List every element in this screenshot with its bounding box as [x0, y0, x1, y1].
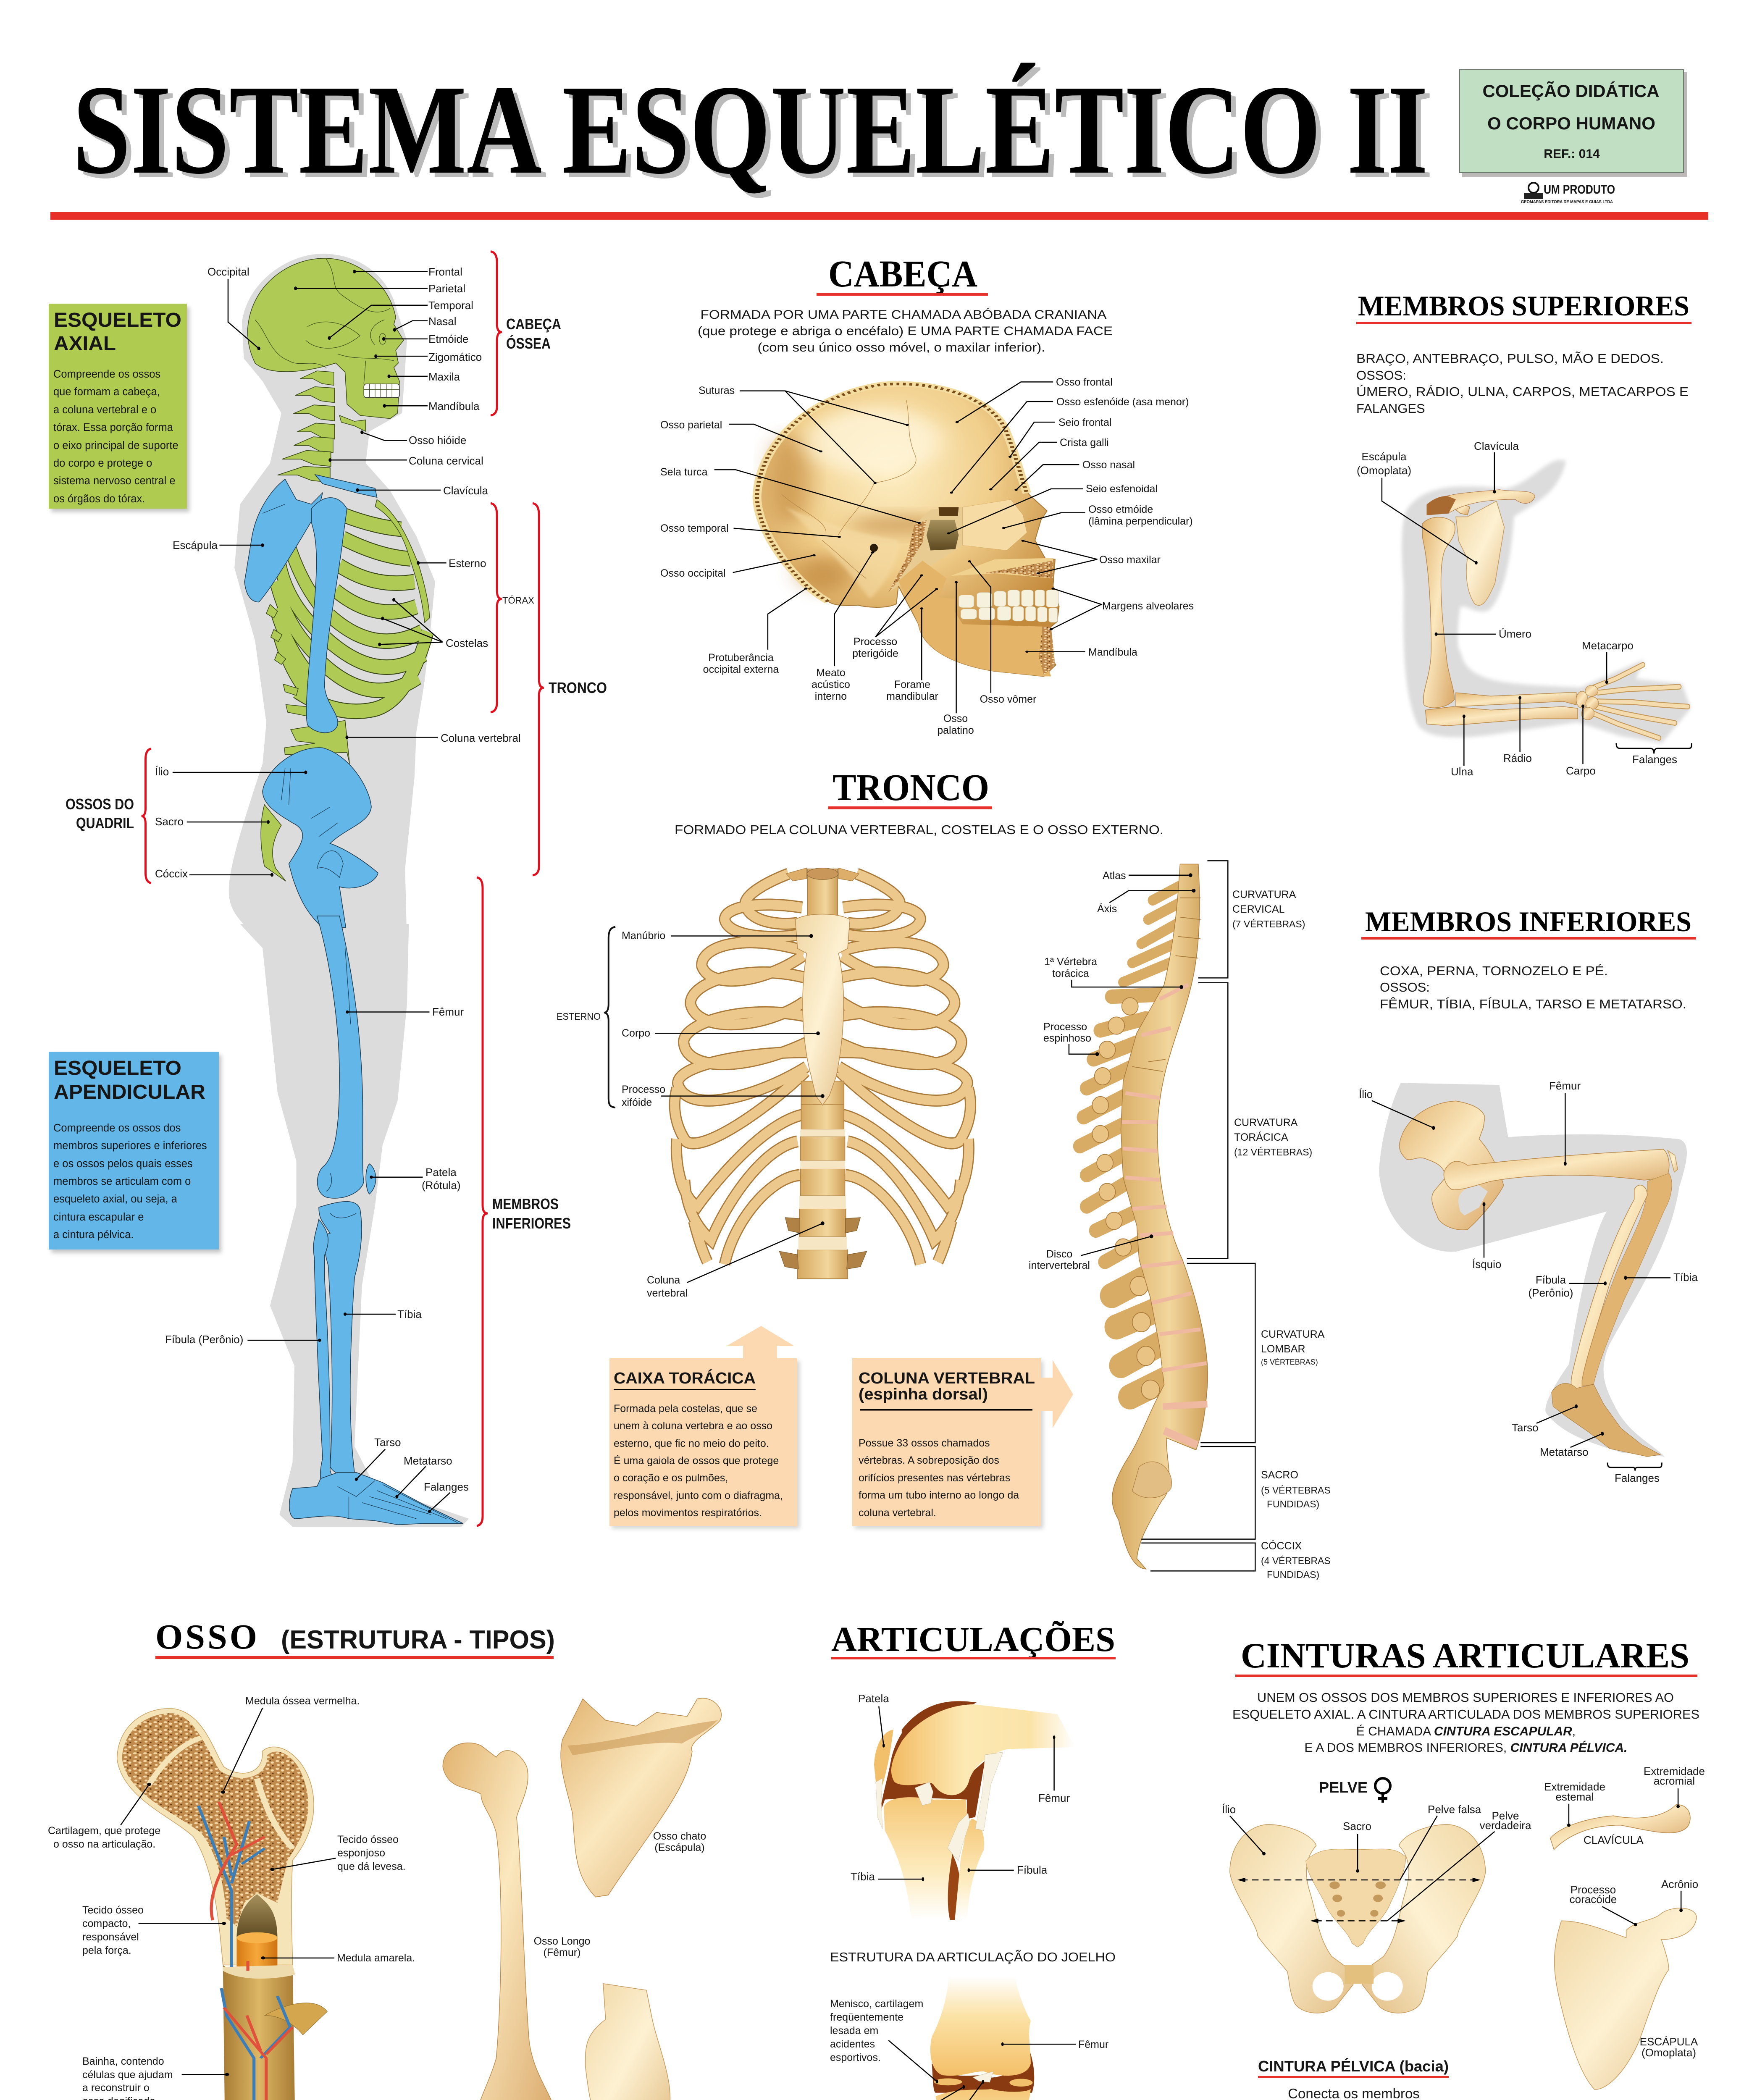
- vertebral column labels: torácica: [1052, 968, 1089, 979]
- knee labels top: Tíbia: [851, 1870, 875, 1883]
- skull labels: Osso etmóide: [1088, 504, 1153, 515]
- vertebral column labels: (7 VÉRTEBRAS): [1232, 919, 1305, 929]
- intro cinturas: [1232, 1690, 1699, 1755]
- vertebral column labels: Atlas: [1103, 870, 1126, 882]
- callout: caixa torácica with up arrow: unem à coluna vertebra e ao osso: [614, 1420, 772, 1432]
- cinturas labels: acromial: [1654, 1774, 1695, 1787]
- skull labels: acústico: [812, 679, 850, 690]
- callout: esqueleto apendicular: cintura escapular e: [53, 1211, 144, 1223]
- bracket headings: CABEÇA: [506, 315, 561, 333]
- pelve heading with female symbol: [1319, 1778, 1390, 1803]
- cinturas labels: ESCÁPULA: [1640, 2035, 1698, 2048]
- leg labels: Ílio: [1359, 1088, 1373, 1100]
- leg labels: [1359, 1079, 1698, 1484]
- skeleton labels: Zigomático: [428, 351, 482, 363]
- skull labels: Osso maxilar: [1099, 554, 1161, 566]
- heading cinturas: CINTURAS ARTICULARES: [1241, 1636, 1689, 1675]
- callout: caixa torácica with up arrow: pelos movimentos respiratórios.: [614, 1507, 762, 1519]
- leg labels: Ísquio: [1472, 1258, 1501, 1270]
- panel: cabeça: [660, 253, 1194, 736]
- vertebral column labels: FUNDIDAS): [1267, 1499, 1319, 1509]
- osso labels: Osso chato: [653, 1830, 706, 1842]
- arm labels: (Omoplata): [1357, 464, 1411, 477]
- callout: esqueleto axial: do corpo e protege o: [53, 457, 152, 469]
- bone section illustration: [117, 1708, 336, 2100]
- cinturas labels: [1222, 1765, 1705, 2059]
- cinturas labels: verdadeira: [1480, 1819, 1531, 1832]
- callout: coluna vertebral with right arrow: COLUNA VERTEBRAL: [859, 1370, 1035, 1387]
- skull labels: mandibular: [886, 690, 938, 702]
- intro tronco: FORMADO PELA COLUNA VERTEBRAL, COSTELAS E O OSSO EXTERNO.: [675, 822, 1163, 837]
- callout: esqueleto axial: ESQUELETO: [54, 309, 181, 331]
- intro membros inferiores: FÊMUR, TÍBIA, FÍBULA, TARSO E METATARSO.: [1380, 997, 1686, 1011]
- vertebral column labels: CERVICAL: [1232, 903, 1285, 915]
- appendicular bones upper (blue): [244, 475, 378, 928]
- callout: caixa torácica with up arrow: responsável, junto com o diafragma,: [614, 1490, 783, 1502]
- cinturas labels: Ílio: [1222, 1803, 1236, 1816]
- skeleton labels: (Rótula): [422, 1179, 460, 1192]
- cinturas labels: estemal: [1555, 1790, 1594, 1803]
- publisher mark: UM PRODUTO: [1544, 183, 1615, 197]
- skeleton labels: Clavícula: [443, 484, 488, 497]
- skeleton labels: Nasal: [428, 315, 456, 328]
- callout: esqueleto axial: [49, 304, 189, 512]
- skeleton labels: Frontal: [428, 265, 462, 278]
- callout: caixa torácica with up arrow: o coração e os pulmões,: [614, 1472, 728, 1484]
- skull labels: Osso occipital: [660, 567, 726, 579]
- osso labels: compacto,: [82, 1918, 131, 1929]
- vertebral column illustration: [1069, 861, 1255, 1571]
- skull labels: Osso: [943, 713, 968, 724]
- skeleton labels: Falanges: [424, 1480, 469, 1493]
- skull labels: Osso temporal: [660, 522, 729, 534]
- callout: esqueleto axial: a coluna vertebral e o: [53, 404, 156, 416]
- skeleton labels: Tarso: [374, 1436, 401, 1449]
- osso labels: responsável: [82, 1931, 139, 1943]
- skeleton labels: Metatarso: [404, 1454, 452, 1467]
- osso labels: [48, 1695, 706, 2100]
- vertebral column labels: CURVATURA: [1234, 1117, 1298, 1129]
- callout: esqueleto axial: sistema nervoso central e: [53, 475, 176, 487]
- cinturas labels: Acrônio: [1661, 1878, 1698, 1890]
- vertebral column labels: (5 VÉRTEBRAS): [1261, 1358, 1318, 1366]
- vertebral column labels: 1ª Vértebra: [1044, 956, 1097, 968]
- skeleton labels: [155, 265, 534, 1493]
- bracket headings: INFERIORES: [492, 1215, 571, 1232]
- skeleton labels: Esterno: [449, 557, 486, 570]
- leg labels: Falanges: [1615, 1472, 1660, 1484]
- knee labels top: Patela: [858, 1692, 889, 1705]
- vertebral column labels: FUNDIDAS): [1267, 1569, 1319, 1580]
- intro cinturas: UNEM OS OSSOS DOS MEMBROS SUPERIORES E INFERIORES AO: [1257, 1690, 1674, 1705]
- body silhouette: [229, 254, 469, 1527]
- skeleton labels: Coluna cervical: [409, 454, 483, 467]
- vertebral column labels: CÓCCIX: [1261, 1540, 1302, 1552]
- heading tronco: TRONCO: [833, 767, 989, 808]
- osso labels: Osso Longo: [534, 1935, 590, 1947]
- skull labels: Seio frontal: [1058, 417, 1111, 428]
- cinturas labels: Processo: [1571, 1883, 1616, 1896]
- clavicle and scapula illustration: [1550, 1788, 1697, 2090]
- vertebral column labels: (12 VÉRTEBRAS): [1234, 1147, 1312, 1158]
- intro membros superiores: BRAÇO, ANTEBRAÇO, PULSO, MÃO E DEDOS.: [1356, 351, 1664, 366]
- skull labels: occipital externa: [703, 664, 779, 675]
- intro cabeça: FORMADA POR UMA PARTE CHAMADA ABÓBADA CRANIANA: [701, 308, 1106, 322]
- callout: esqueleto apendicular: APENDICULAR: [54, 1081, 205, 1103]
- callout: caixa torácica with up arrow: [609, 1326, 800, 1529]
- skull labels: Protuberância: [708, 652, 774, 664]
- osso labels: Cartilagem, que protege: [48, 1825, 160, 1837]
- skeleton labels: Ílio: [155, 765, 169, 778]
- leg labels: Metatarso: [1540, 1446, 1589, 1458]
- skull labels: Mandíbula: [1088, 646, 1137, 658]
- skull labels: [660, 376, 1194, 736]
- skull labels: Osso frontal: [1056, 376, 1113, 388]
- leg illustration: [1372, 1083, 1687, 1471]
- skull labels: Osso parietal: [660, 419, 722, 431]
- intro cinturas: É CHAMADA CINTURA ESCAPULAR,: [1356, 1725, 1576, 1738]
- callout: esqueleto apendicular: membros se articulam com o: [53, 1176, 191, 1187]
- rib cage labels: Manúbrio: [622, 930, 665, 942]
- leg bones (blue): [289, 916, 463, 1525]
- intro membros inferiores: COXA, PERNA, TORNOZELO E PÉ.: [1380, 963, 1608, 978]
- rib cage labels: ESTERNO: [557, 1011, 601, 1022]
- skeleton labels: Patela: [425, 1166, 457, 1179]
- skull labels: Processo: [854, 636, 897, 648]
- heading osso: [155, 1617, 555, 1659]
- leg labels: Tarso: [1512, 1421, 1539, 1434]
- arm labels: Clavícula: [1474, 440, 1519, 452]
- callout: caixa torácica with up arrow: Formada pela costelas, que se: [614, 1403, 757, 1415]
- callout: esqueleto axial: AXIAL: [54, 333, 116, 355]
- vertebral column labels: (4 VÉRTEBRAS: [1261, 1555, 1331, 1566]
- panel: full skeleton: [155, 254, 534, 1527]
- osso labels: Tecido ósseo: [82, 1904, 144, 1916]
- intro membros superiores: FALANGES: [1356, 401, 1425, 416]
- osso labels: pela força.: [82, 1945, 131, 1956]
- osso labels: (Fêmur): [544, 1947, 580, 1958]
- intro cinturas: ESQUELETO AXIAL. A CINTURA ARTICULADA DOS MEMBROS SUPERIORES: [1232, 1707, 1699, 1722]
- osso labels: o osso na articulação.: [53, 1838, 155, 1850]
- vertebral column labels: SACRO: [1261, 1469, 1298, 1481]
- intro membros superiores: ÚMERO, RÁDIO, ULNA, CARPOS, METACARPOS E: [1356, 384, 1689, 399]
- knee labels bottom: acidentes: [830, 2038, 875, 2050]
- knee labels top: Fêmur: [1038, 1792, 1070, 1804]
- callout: esqueleto apendicular: [49, 1052, 221, 1253]
- intro cabeça: [698, 308, 1113, 354]
- skeleton labels: Mandíbula: [428, 400, 480, 412]
- vertebral column labels: CURVATURA: [1261, 1328, 1325, 1340]
- callout: esqueleto axial: que formam a cabeça,: [53, 386, 160, 398]
- knee labels top: Fíbula: [1017, 1864, 1048, 1876]
- arm labels: Ulna: [1451, 765, 1473, 778]
- text block: cintura pélvica: [1255, 2058, 1453, 2100]
- title: SISTEMA ESQUELÉTICO II: [78, 63, 1433, 205]
- rib cage labels: Coluna: [647, 1274, 680, 1286]
- cinturas labels: Pelve falsa: [1428, 1803, 1481, 1816]
- skull labels: Meato: [816, 667, 846, 679]
- skeleton labels: Coluna vertebral: [441, 732, 521, 744]
- axial skeleton bones (green): [247, 258, 429, 881]
- callout: caixa torácica with up arrow: É uma gaiola de ossos que protege: [614, 1454, 779, 1467]
- cinturas labels: Extremidade: [1544, 1780, 1605, 1793]
- knee front view: [888, 1976, 1076, 2100]
- skeleton labels: Etmóide: [428, 333, 468, 345]
- skull labels: Osso esfenóide (asa menor): [1056, 396, 1189, 408]
- bracket headings: TRONCO: [549, 679, 607, 696]
- bracket headings: QUADRIL: [76, 814, 134, 832]
- arm labels: [1357, 440, 1677, 778]
- callout: coluna vertebral with right arrow: [852, 1358, 1073, 1529]
- callout: esqueleto apendicular: ESQUELETO: [54, 1057, 181, 1079]
- heading osso: OSSO: [155, 1617, 257, 1656]
- heading articulações: ARTICULAÇÕES: [831, 1620, 1115, 1659]
- vertebral column labels: Áxis: [1097, 903, 1117, 915]
- header red bar: [50, 212, 1708, 220]
- callout: esqueleto apendicular: Compreende os ossos dos: [53, 1122, 181, 1134]
- panel: tronco: [557, 767, 1331, 1580]
- skeleton labels: Maxila: [428, 370, 460, 383]
- collection badge: REF.: 014: [1544, 147, 1600, 161]
- leg labels: Fíbula: [1536, 1273, 1566, 1286]
- knee labels bottom: freqüentemente: [830, 2011, 903, 2023]
- pelve heading with female symbol: PELVE: [1319, 1779, 1368, 1796]
- skeleton labels: Occipital: [207, 265, 249, 278]
- intro membros inferiores: [1380, 963, 1686, 1011]
- collection badge: [1460, 70, 1687, 177]
- skull illustration: [714, 382, 1101, 713]
- rib cage labels: xifóide: [622, 1097, 652, 1108]
- collection badge: O CORPO HUMANO: [1487, 113, 1655, 133]
- callout: esqueleto axial: Compreende os ossos: [53, 368, 160, 380]
- rib cage labels: vertebral: [647, 1287, 688, 1299]
- publisher mark: GEOMAPAS EDITORA DE MAPAS E GUIAS LTDA: [1521, 200, 1613, 205]
- arm labels: Escápula: [1362, 450, 1407, 463]
- skull labels: Suturas: [699, 385, 735, 396]
- skeleton labels: Tíbia: [397, 1308, 422, 1320]
- arm labels: Rádio: [1503, 752, 1532, 764]
- callout: coluna vertebral with right arrow: Possue 33 ossos chamados: [859, 1437, 990, 1449]
- knee labels bottom: Menisco, cartilagem: [830, 1998, 923, 2010]
- skull labels: Forame: [894, 679, 930, 690]
- red braces: [142, 252, 544, 1526]
- skeleton labels: Escápula: [173, 539, 218, 551]
- bracket headings: OSSOS DO: [66, 795, 134, 813]
- arm labels: Úmero: [1499, 627, 1531, 640]
- skeleton labels: Temporal: [428, 299, 473, 312]
- skeleton labels: Sacro: [155, 815, 184, 828]
- vertebral column labels: Disco: [1046, 1248, 1072, 1260]
- intro cinturas: E A DOS MEMBROS INFERIORES, CINTURA PÉLVICA.: [1305, 1740, 1627, 1755]
- heading membros superiores: MEMBROS SUPERIORES: [1358, 290, 1689, 322]
- vertebral column labels: intervertebral: [1029, 1260, 1090, 1271]
- skull labels: Osso vômer: [980, 693, 1036, 705]
- intro cabeça: (que protege e abriga o encéfalo) E UMA PARTE CHAMADA FACE: [698, 324, 1113, 338]
- osso labels: a reconstruir o: [82, 2082, 150, 2094]
- heading membros inferiores: MEMBROS INFERIORES: [1365, 906, 1691, 937]
- intro membros superiores: OSSOS:: [1356, 368, 1406, 383]
- osso labels: Bainha, contendo: [82, 2055, 164, 2067]
- vertebral column labels: LOMBAR: [1261, 1343, 1305, 1355]
- heading osso: (ESTRUTURA - TIPOS): [281, 1625, 555, 1654]
- skull labels: palatino: [937, 724, 974, 736]
- skeleton labels: Fêmur: [432, 1005, 464, 1018]
- arm labels: Falanges: [1632, 753, 1677, 766]
- callout: caixa torácica with up arrow: CAIXA TORÁCICA: [614, 1369, 756, 1387]
- cinturas labels: (Omoplata): [1641, 2046, 1696, 2059]
- osso labels: Tecido ósseo: [337, 1834, 399, 1845]
- vertebral column labels: CURVATURA: [1232, 889, 1296, 900]
- osso labels: esponjoso: [337, 1847, 385, 1859]
- knee labels bottom: Fêmur: [1078, 2039, 1108, 2050]
- knee side view: [874, 1701, 1075, 1920]
- skull labels: pterigóide: [852, 648, 898, 659]
- skull labels: Crista galli: [1060, 437, 1109, 449]
- skeleton labels: Osso hióide: [409, 434, 466, 446]
- knee labels bottom: [830, 1998, 1108, 2100]
- callout: coluna vertebral with right arrow: vértebras. A sobreposição dos: [859, 1454, 999, 1466]
- panel: articulações: [830, 1620, 1116, 2100]
- rib cage labels: Corpo: [622, 1027, 650, 1039]
- cinturas labels: Pelve: [1492, 1809, 1519, 1822]
- skull labels: interno: [815, 690, 847, 702]
- skeleton labels: Fíbula (Perônio): [165, 1333, 243, 1346]
- skeleton labels: Cóccix: [155, 867, 188, 880]
- bracket headings: ÓSSEA: [506, 334, 551, 352]
- skull labels: Margens alveolares: [1102, 600, 1194, 612]
- pelvis illustration: [1230, 1816, 1495, 2013]
- osso labels: que dá levesa.: [337, 1861, 406, 1872]
- title: SISTEMA ESQUELÉTICO II: [73, 58, 1428, 200]
- knee labels bottom: esportivos.: [830, 2052, 881, 2063]
- structure subheading: ESTRUTURA DA ARTICULAÇÃO DO JOELHO: [830, 1950, 1116, 1964]
- callout: coluna vertebral with right arrow: (espinha dorsal): [859, 1386, 988, 1403]
- vertebral column labels: TORÁCICA: [1234, 1131, 1288, 1143]
- rib cage illustration: [604, 868, 971, 1283]
- vertebral column labels: [1029, 870, 1331, 1580]
- callout: coluna vertebral with right arrow: forma um tubo interno ao longo da: [859, 1489, 1019, 1501]
- arm labels: Carpo: [1566, 764, 1596, 777]
- skull labels: Seio esfenoidal: [1086, 483, 1158, 495]
- skeleton labels: Costelas: [446, 637, 488, 649]
- leg labels: Fêmur: [1549, 1079, 1581, 1092]
- leg labels: (Perônio): [1529, 1286, 1573, 1299]
- bracket headings: MEMBROS: [492, 1195, 559, 1213]
- panel: osso: [48, 1617, 721, 2100]
- vertebral column labels: (5 VÉRTEBRAS: [1261, 1485, 1331, 1496]
- panel: membros superiores: [1356, 290, 1691, 778]
- callout: caixa torácica with up arrow: esterno, que fic no meio do peito.: [614, 1438, 769, 1449]
- osso labels: (Escápula): [654, 1842, 705, 1853]
- callout: esqueleto axial: tórax. Essa porção forma: [53, 422, 173, 433]
- callout: esqueleto apendicular: esqueleto axial, ou seja, a: [53, 1193, 178, 1205]
- callout: esqueleto apendicular: membros superiores e inferiores: [53, 1140, 207, 1152]
- rib cage labels: [557, 930, 688, 1299]
- callout: esqueleto axial: os órgãos do tórax.: [53, 493, 145, 505]
- skull labels: Sela turca: [660, 466, 708, 478]
- panel: membros inferiores: [1359, 906, 1698, 1484]
- knee labels bottom: lesada em: [830, 2025, 878, 2037]
- leader lines: [173, 270, 446, 877]
- text block: cintura pélvica: CINTURA PÉLVICA (bacia): [1258, 2058, 1449, 2075]
- cinturas labels: Sacro: [1343, 1820, 1371, 1832]
- intro cabeça: (com seu único osso móvel, o maxilar inferior).: [758, 341, 1045, 354]
- arm labels: Metacarpo: [1582, 639, 1634, 652]
- callout: esqueleto apendicular: a cintura pélvica.: [53, 1229, 134, 1241]
- callout: coluna vertebral with right arrow: coluna vertebral.: [859, 1507, 936, 1519]
- bracket headings: [66, 315, 607, 1232]
- panel: cinturas articulares: [1222, 1636, 1705, 2100]
- intro membros inferiores: OSSOS:: [1380, 980, 1430, 995]
- vertebral column labels: Processo: [1043, 1021, 1087, 1033]
- collection badge: COLEÇÃO DIDÁTICA: [1483, 81, 1659, 101]
- publisher mark: [1521, 183, 1615, 205]
- arm illustration: [1382, 452, 1691, 766]
- callout: esqueleto axial: o eixo principal de suporte: [53, 440, 179, 452]
- rib cage labels: Processo: [622, 1084, 665, 1095]
- skeleton labels: Parietal: [428, 282, 465, 295]
- callout: coluna vertebral with right arrow: orifícios presentes nas vértebras: [859, 1472, 1010, 1484]
- cinturas labels: coracóide: [1570, 1893, 1617, 1906]
- leg labels: Tíbia: [1673, 1271, 1698, 1284]
- skeleton labels: TÓRAX: [502, 595, 534, 606]
- skull labels: (lâmina perpendicular): [1088, 515, 1193, 527]
- skull labels: Osso nasal: [1082, 459, 1135, 471]
- intro membros superiores: [1356, 351, 1689, 416]
- callout: esqueleto apendicular: e os ossos pelos quais esses: [53, 1158, 193, 1170]
- vertebral column labels: espinhoso: [1043, 1032, 1091, 1044]
- osso labels: células que ajudam: [82, 2069, 173, 2081]
- knee labels top: [851, 1692, 1070, 1883]
- cinturas labels: CLAVÍCULA: [1584, 1834, 1644, 1846]
- osso labels: Medula óssea vermelha.: [245, 1695, 360, 1707]
- osso labels: Medula amarela.: [337, 1952, 415, 1964]
- heading cabeça: CABEÇA: [828, 253, 977, 295]
- cinturas labels: Extremidade: [1644, 1765, 1705, 1777]
- long femur, flat and short bones: [443, 1698, 721, 2100]
